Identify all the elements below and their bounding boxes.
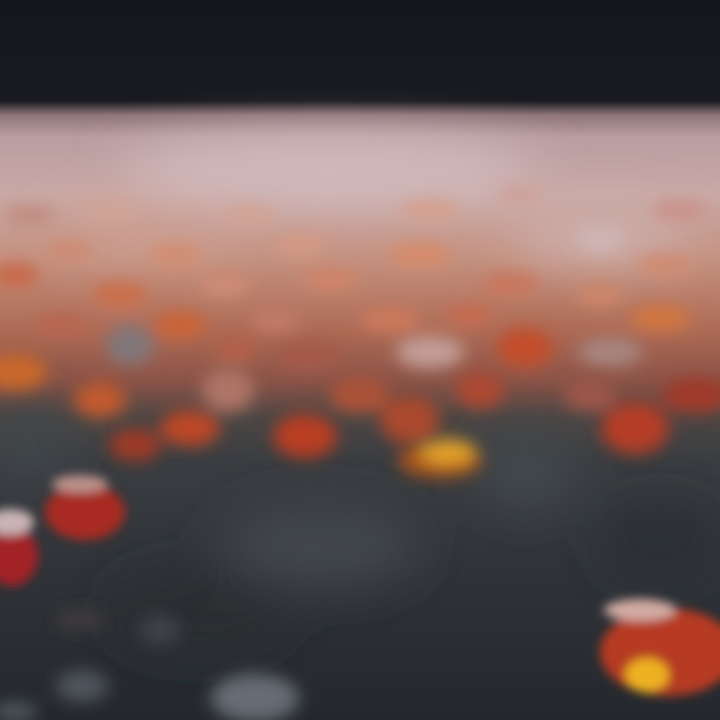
pale pink far field <box>60 138 690 261</box>
slate surface texture <box>0 404 720 650</box>
pale blurred spots in the foreground <box>0 610 299 720</box>
mottled capsules in the middle distance <box>0 186 708 369</box>
yellow highlight capsule <box>398 439 482 478</box>
capsule: bottom right with yellow glow <box>600 599 720 696</box>
front row of capsules <box>0 354 720 461</box>
capsule: left middle <box>45 475 125 540</box>
capsule: left edge <box>0 509 38 586</box>
